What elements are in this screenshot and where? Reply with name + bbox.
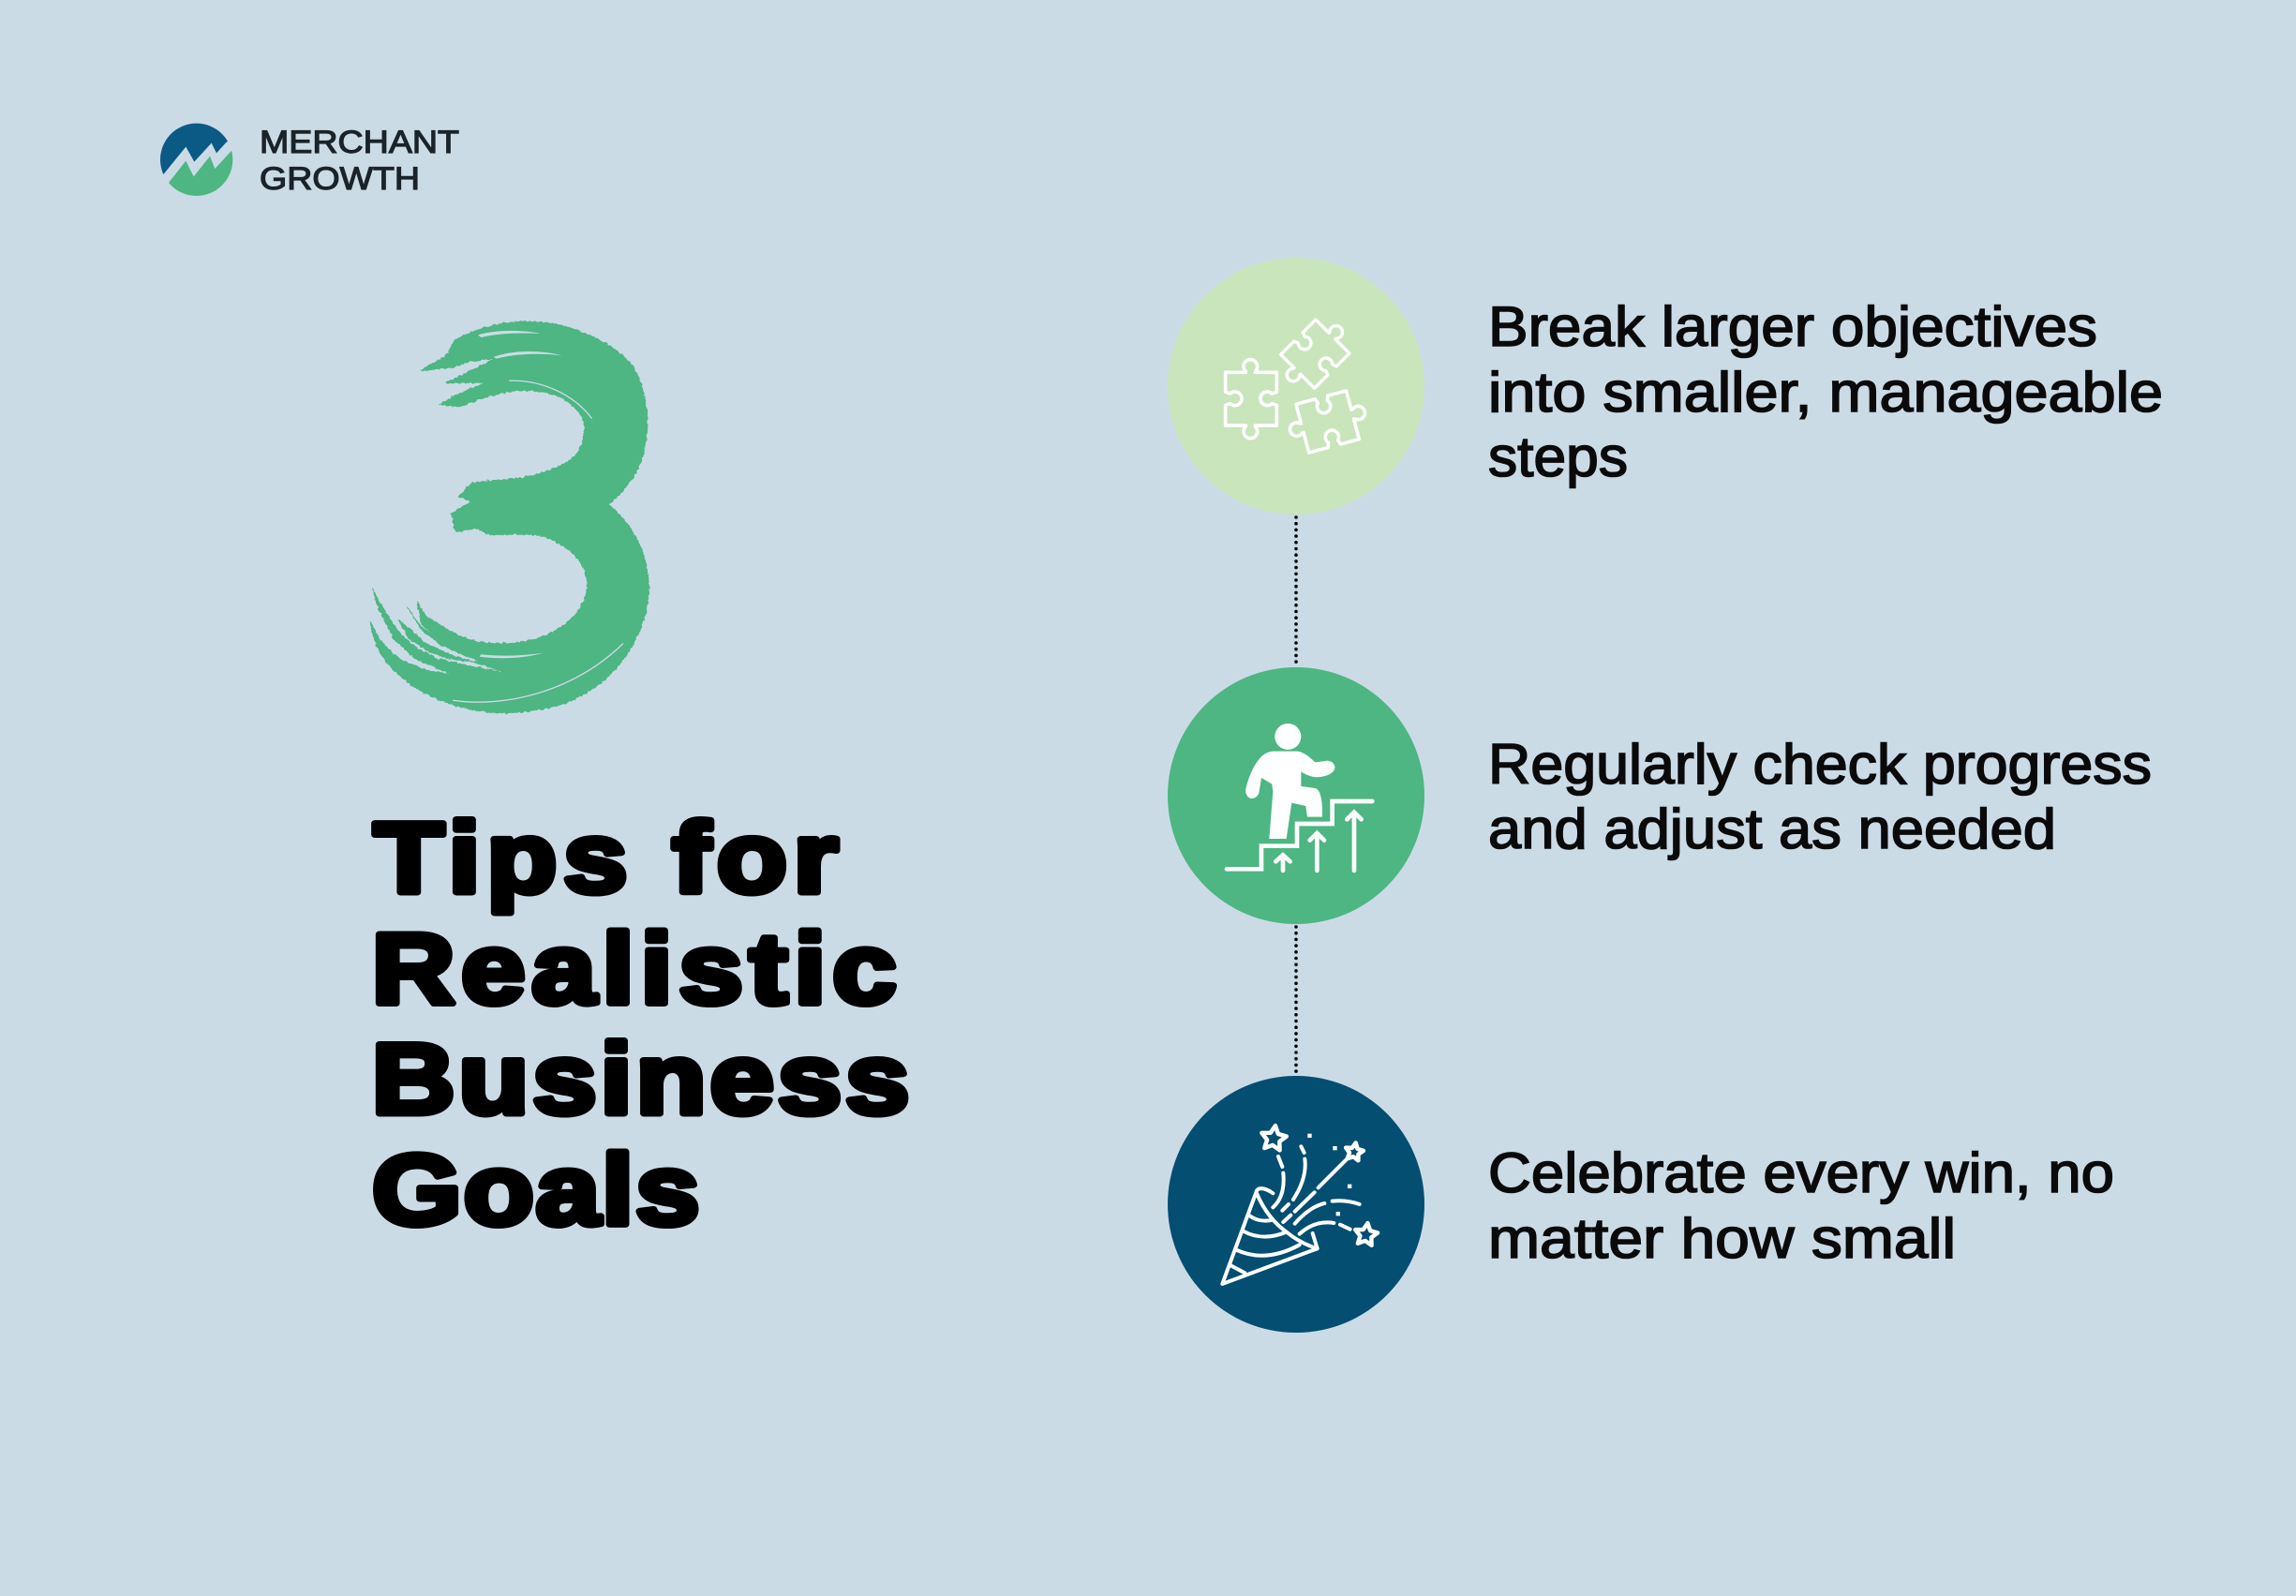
logo wordmark: GROWTH	[260, 161, 420, 197]
big brush numeral 3	[370, 321, 649, 713]
brush streaks	[478, 331, 562, 658]
step 3 text	[1488, 1141, 2114, 1270]
step 3 text: Celebrate every win, no	[1488, 1141, 2114, 1204]
step 1 text: into smaller, manageable	[1488, 361, 2163, 424]
logo wordmark: MERCHANT	[260, 125, 459, 160]
step 2 text	[1488, 733, 2152, 860]
step 1: puzzle icon circle	[1168, 258, 1424, 515]
title: Business	[372, 1023, 909, 1135]
step 2 text: and adjust as needed	[1488, 798, 2056, 860]
icon: puzzle pieces	[1226, 311, 1371, 456]
icon: person climbing stairs	[1227, 723, 1372, 871]
step 3: party popper icon circle	[1168, 1076, 1424, 1333]
title: Realistic	[372, 914, 897, 1025]
title	[372, 802, 909, 1246]
icon: party popper	[1222, 1124, 1379, 1284]
dotted connector 1	[1294, 517, 1298, 667]
logo wordmark	[260, 125, 459, 197]
title: Tips for	[374, 802, 838, 914]
step 1 text	[1488, 295, 2163, 488]
title: Goals	[372, 1135, 700, 1246]
step 2 text: Regularly check progress	[1488, 733, 2152, 796]
step 2: climbing stairs icon circle	[1168, 667, 1424, 924]
step 1 text: Break larger objectives	[1488, 295, 2097, 358]
step 3 text: matter how small	[1488, 1207, 1956, 1270]
icon: logo mountain circle	[160, 124, 232, 196]
logo: Merchant Growth	[160, 124, 459, 196]
dotted connector 2	[1294, 927, 1298, 1076]
step 1 text: steps	[1488, 425, 1628, 488]
